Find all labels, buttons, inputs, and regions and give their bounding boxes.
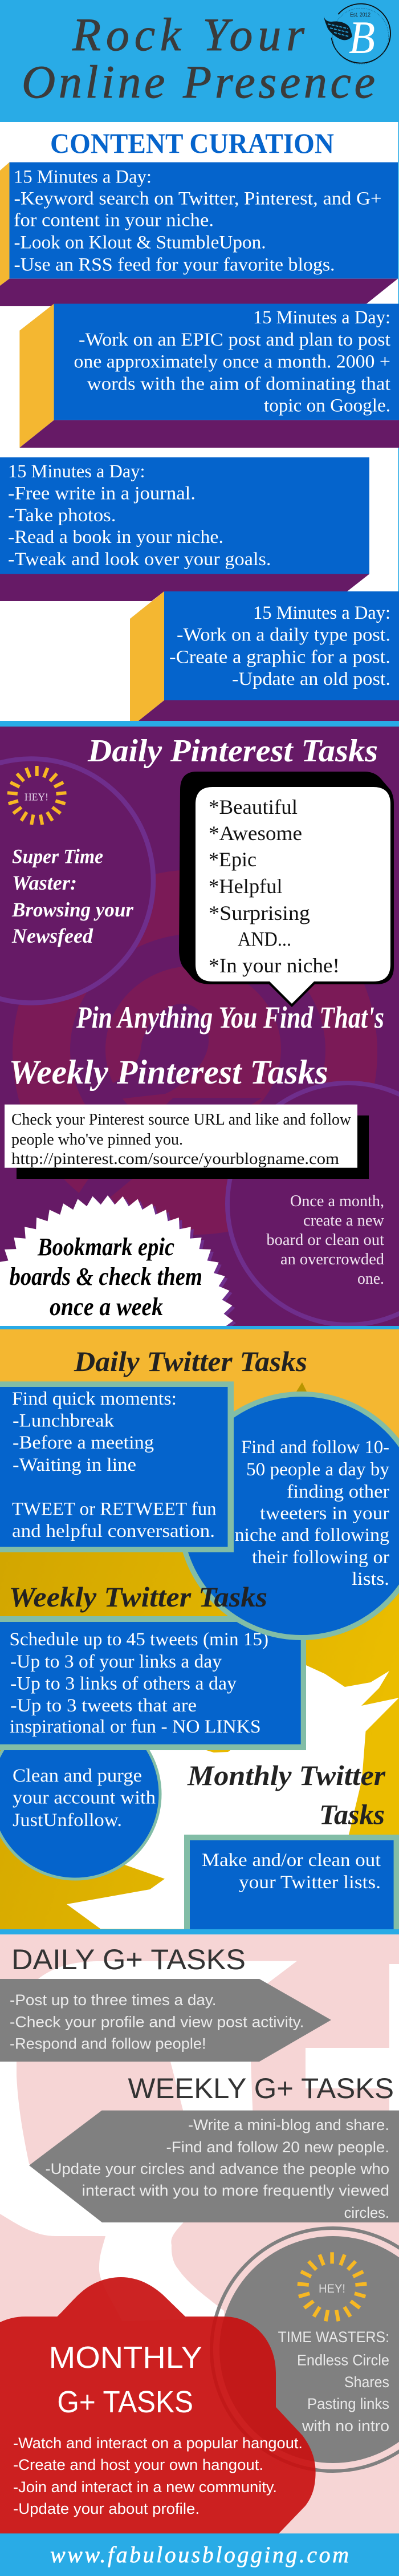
- text: find and follow: Find and follow 10-: [241, 1437, 389, 1458]
- starburst: bookmark: [0, 1195, 236, 1337]
- footer: [0, 2533, 399, 2576]
- text: monthly g+: -Join and interact in a new community.: [13, 2478, 277, 2496]
- text: super time waster: Newsfeed: [11, 924, 93, 947]
- text: source url: people who've pinned you.: [11, 1130, 183, 1149]
- text: bookmark: [10, 1238, 202, 1315]
- circle callout: time wasters: [211, 2228, 399, 2471]
- text: bubble list: *Epic: [209, 848, 256, 871]
- text: daily twitter: [12, 1389, 217, 1541]
- arrow panel: weekly g+: [29, 2111, 399, 2222]
- circle: clean and purge: [0, 1750, 162, 1881]
- text: weekly g+: [46, 2116, 389, 2221]
- text: bookmark: boards & check them: [9, 1263, 202, 1291]
- text: step 3: -Take photos.: [8, 505, 116, 526]
- text: weekly twitter: -Up to 3 tweets that are: [10, 1695, 197, 1716]
- text: daily twitter: -Lunchbreak: [13, 1411, 115, 1431]
- panel: weekly twitter box: [0, 1616, 306, 1750]
- text: weekly g+: -Update your circles and advance the people who: [46, 2160, 389, 2177]
- panel: monthly twitter box: [184, 1835, 399, 1929]
- text: find and follow: lists.: [352, 1569, 389, 1589]
- text: step 4: 15 Minutes a Day:: [253, 603, 390, 623]
- text: super time waster: Super Time: [12, 845, 103, 868]
- text: bubble list: *In your niche!: [209, 954, 340, 977]
- text: once a month: Once a month,: [290, 1192, 384, 1210]
- background pinterest logo: [13, 870, 377, 1235]
- text: step 3: -Tweak and look over your goals.: [8, 549, 271, 570]
- heading: monthly twitter tasks: Monthly Twitter: [187, 1759, 386, 1791]
- text: daily twitter: TWEET or RETWEET fun: [12, 1499, 217, 1519]
- text: time wasters: Endless Circle: [297, 2352, 389, 2369]
- text: bookmark: Bookmark epic: [37, 1233, 174, 1261]
- text: source url: http://pinterest.com/source/yourblogname.com: [11, 1150, 339, 1168]
- text: weekly g+: -Find and follow 20 new people.: [166, 2139, 389, 2156]
- google plus section: [0, 1929, 399, 2534]
- text: weekly twitter: -Up to 3 links of others a day: [10, 1674, 237, 1694]
- text: find and follow: [235, 1437, 389, 1589]
- bird beak tip: [296, 1382, 307, 1392]
- text: step 1: 15 Minutes a Day:: [14, 167, 152, 187]
- text: source url: Check your Pinterest source URL and like and follow: [11, 1110, 351, 1129]
- text: step 2: 15 Minutes a Day:: [253, 307, 390, 328]
- title: [22, 9, 375, 108]
- text: monthly g+: [13, 2435, 303, 2517]
- speech bubble: [179, 772, 394, 1007]
- header panel: [0, 0, 399, 122]
- text: weekly g+: circles.: [344, 2204, 389, 2221]
- text: source url: [11, 1110, 351, 1168]
- text: clean and purge: [13, 1766, 156, 1831]
- text: bookmark: once a week: [50, 1293, 163, 1321]
- heading: monthly twitter tasks: Tasks: [319, 1799, 385, 1831]
- text: find and follow: niche and following: [235, 1525, 389, 1545]
- text: bubble list: *Helpful: [209, 875, 283, 898]
- text: once a month: one.: [357, 1270, 384, 1288]
- text: monthly twitter: [202, 1850, 381, 1893]
- text: daily twitter: -Waiting in line: [13, 1455, 136, 1475]
- title: Rock Your: [72, 9, 305, 60]
- text: find and follow: their following or: [252, 1547, 389, 1568]
- text: clean and purge: Clean and purge: [13, 1766, 142, 1786]
- text: find and follow: 50 people a day by: [246, 1459, 389, 1480]
- heading: daily pinterest tasks: Daily Pinterest Tasks: [87, 733, 378, 769]
- text: weekly twitter: Schedule up to 45 tweets (min 15): [9, 1629, 268, 1650]
- circle: find and follow: [180, 1394, 399, 1638]
- icon: hey burst: [7, 766, 66, 825]
- text: daily g+: [10, 1991, 304, 2052]
- icon: hey burst: [298, 2252, 367, 2321]
- text: step 4: -Create a graphic for a post.: [169, 647, 390, 667]
- text: super time waster: Browsing your: [11, 898, 134, 921]
- text: step 3: -Read a book in your niche.: [8, 527, 223, 547]
- text: step 2: words with the aim of dominating that: [87, 374, 390, 395]
- text: weekly twitter: -Up to 3 of your links a day: [10, 1652, 222, 1672]
- text: find and follow: tweeters in your: [260, 1503, 389, 1524]
- text: once a month: [266, 1192, 385, 1288]
- circle callout: time waster: HEY!: [25, 792, 48, 803]
- text: step 1: -Look on Klout & StumbleUpon.: [14, 233, 266, 253]
- text: time wasters: TIME WASTERS:: [278, 2328, 389, 2346]
- text: step 1: -Use an RSS feed for your favorite blogs.: [14, 254, 335, 275]
- twitter section: [0, 1326, 399, 1929]
- background g+ logo: [0, 1961, 399, 2321]
- heading: daily g+ tasks: DAILY G+ TASKS: [11, 1944, 246, 1975]
- text: weekly twitter: inspirational or fun - NO LINKS: [10, 1717, 261, 1737]
- text: bubble list: *Surprising: [209, 902, 310, 924]
- text: bubble list: *Awesome: [209, 822, 302, 845]
- text: clean and purge: JustUnfollow.: [13, 1810, 122, 1831]
- text: step 1: for content in your niche.: [14, 210, 214, 231]
- panel: daily twitter box: [0, 1381, 234, 1552]
- footer url: www.fabulousblogging.com: [50, 2542, 349, 2567]
- text: bubble list: AND...: [238, 928, 291, 951]
- heading: monthly g+ tasks: G+ TASKS: [57, 2385, 193, 2419]
- text: step 4: [169, 603, 390, 689]
- text: daily g+: -Respond and follow people!: [10, 2035, 206, 2052]
- pinterest section: [0, 721, 399, 1337]
- circle callout: time waster: [0, 758, 153, 1003]
- heading: content curation: CONTENT CURATION: [50, 127, 334, 159]
- text: daily twitter: Find quick moments:: [12, 1389, 177, 1409]
- text: once a month: an overcrowded: [280, 1251, 384, 1268]
- heading: weekly twitter tasks: Weekly Twitter Tasks: [9, 1581, 267, 1613]
- text: monthly twitter: your Twitter lists.: [239, 1872, 381, 1893]
- text: step 2: one approximately once a month. 2000 +: [74, 351, 390, 372]
- heading: monthly g+ tasks: MONTHLY: [49, 2340, 202, 2375]
- text: step 4: -Work on a daily type post.: [177, 625, 390, 646]
- text: weekly twitter: [9, 1629, 268, 1737]
- text: find and follow: finding other: [287, 1482, 389, 1502]
- circle callout: once a month: [227, 1083, 399, 1325]
- text: time wasters: with no intro: [302, 2417, 389, 2435]
- text: time wasters: [278, 2328, 389, 2435]
- panel: curation step 1: [0, 162, 398, 306]
- text: step 2: -Work on an EPIC post and plan to post: [79, 330, 390, 350]
- logo badge: Est. 2012: [350, 12, 370, 18]
- text: step 3: 15 Minutes a Day:: [8, 461, 145, 482]
- text: super time waster: [11, 845, 134, 947]
- gold bird backdrop: [0, 1552, 399, 1929]
- text: once a month: board or clean out: [266, 1231, 384, 1249]
- text: once a month: create a new: [303, 1212, 385, 1230]
- text: daily twitter: -Before a meeting: [13, 1433, 154, 1453]
- heading: daily twitter tasks: Daily Twitter Tasks: [74, 1345, 307, 1377]
- text: step 2: [74, 307, 390, 416]
- text: time wasters: Shares: [344, 2374, 389, 2391]
- text: step 2: topic on Google.: [264, 396, 390, 416]
- text: daily twitter: and helpful conversation.: [12, 1521, 215, 1541]
- note box: source url: [5, 1105, 369, 1179]
- circle callout: time wasters: HEY!: [319, 2282, 345, 2295]
- text: step 3: [8, 461, 271, 570]
- text: weekly g+: -Write a mini-blog and share.: [188, 2116, 389, 2133]
- heading: weekly g+ tasks: WEEKLY G+ TASKS: [128, 2072, 394, 2104]
- text: bubble list: *Beautiful: [209, 796, 298, 818]
- heading: monthly g+ tasks: [49, 2340, 202, 2419]
- text: monthly twitter: Make and/or clean out: [202, 1850, 381, 1871]
- text: time wasters: Pasting links: [307, 2395, 389, 2412]
- panel: curation step 2: [19, 304, 399, 448]
- title: Online Presence: [22, 56, 375, 108]
- white bird shape: [67, 1665, 399, 1929]
- text: super time waster: Waster:: [12, 871, 77, 894]
- text: weekly g+: interact with you to more frequently viewed: [82, 2182, 389, 2199]
- red blob panel: monthly g+: [0, 2277, 316, 2533]
- text: monthly g+: -Watch and interact on a popular hangout.: [13, 2435, 303, 2452]
- heading: weekly pinterest tasks: Weekly Pinterest Tasks: [9, 1053, 328, 1091]
- text: clean and purge: your account with: [13, 1788, 156, 1808]
- text: step 4: -Update an old post.: [232, 669, 390, 689]
- logo badge: B: [349, 11, 375, 63]
- logo badge: [324, 4, 390, 64]
- arrow panel: daily g+: [0, 1979, 331, 2062]
- text: bubble list: [209, 796, 340, 977]
- text: daily g+: -Check your profile and view post activity.: [10, 2013, 304, 2030]
- heading: monthly twitter tasks: [187, 1759, 386, 1831]
- panel: curation step 3: [0, 457, 369, 601]
- text: step 1: [14, 167, 382, 275]
- panel: curation step 4: [130, 591, 399, 721]
- text: monthly g+: -Update your about profile.: [13, 2500, 199, 2517]
- text: step 3: -Free write in a journal.: [8, 484, 196, 504]
- text: daily g+: -Post up to three times a day.: [10, 1991, 217, 2009]
- text: monthly g+: -Create and host your own hangout.: [13, 2456, 263, 2473]
- text: step 1: -Keyword search on Twitter, Pinterest, and G+: [14, 188, 382, 209]
